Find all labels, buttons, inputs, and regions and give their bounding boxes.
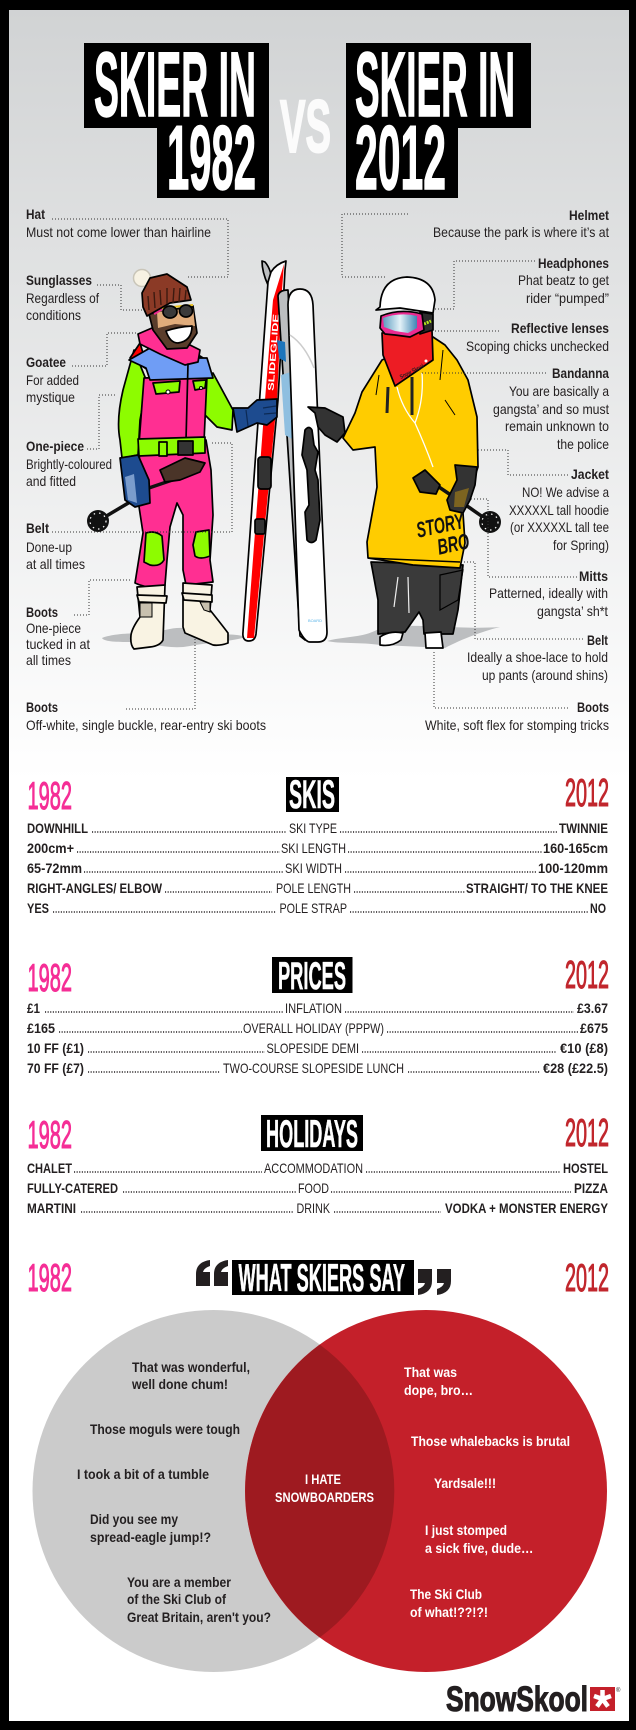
- heading: prices: [272, 955, 352, 998]
- 1982 sayings: spread-eagle jump!?: [90, 1529, 211, 1545]
- panel: skis: [27, 772, 609, 916]
- right mitt: [447, 465, 477, 513]
- 2012 sayings: The Ski Club: [410, 1586, 482, 1602]
- white twin-tip ski: BOARD: [308, 619, 323, 623]
- callout: bandanna: the police: [557, 436, 609, 452]
- callout: boots white: Boots: [577, 699, 609, 715]
- row: ski width: 100-120mm: [538, 860, 608, 876]
- illustration: skier 1982: [87, 270, 277, 649]
- row: overall holiday: £675: [580, 1020, 608, 1036]
- row: pole length: STRAIGHT/ TO THE KNEE: [466, 880, 608, 896]
- right sleeve: [203, 373, 233, 430]
- hood collar: [138, 328, 200, 365]
- callout: goatee: mystique: [26, 389, 75, 405]
- 2012 sayings: [404, 1364, 570, 1620]
- title: SKIER IN: [94, 34, 256, 136]
- bandanna: [382, 330, 433, 386]
- row: slopeside demi: €10 (£8): [560, 1040, 608, 1056]
- callout: bandanna: [422, 365, 609, 452]
- row: pole length: [27, 880, 608, 896]
- 1982 sayings: That was wonderful,: [132, 1359, 250, 1375]
- callout: reflective lenses: Reflective lenses: [511, 320, 609, 336]
- callout: hat: Must not come lower than hairline: [26, 224, 211, 240]
- venn diagram: [32, 1310, 607, 1672]
- left sleeve: [119, 350, 147, 458]
- callout: mitts: Mitts: [579, 568, 608, 584]
- callout: belt: at all times: [26, 556, 85, 572]
- row: food: PIZZA: [574, 1180, 608, 1196]
- row: inflation: INFLATION: [285, 1000, 342, 1016]
- year 1982: 1982: [28, 775, 72, 818]
- callout: headphones: Phat beatz to get: [518, 272, 609, 288]
- callout: sunglasses: Regardless of: [26, 290, 99, 306]
- hoodie graffiti: BRO: [435, 529, 471, 560]
- callout: jacket: for Spring): [553, 537, 609, 553]
- callout: goatee: For added: [26, 372, 79, 388]
- callout: headphones: Headphones: [538, 255, 609, 271]
- panel: what skiers say: [28, 1257, 609, 1672]
- callout: boots tucked: all times: [26, 652, 71, 668]
- row: ski length: [27, 840, 608, 856]
- callout: jacket: (or XXXXXL tall tee: [510, 519, 609, 535]
- pants: [371, 562, 463, 634]
- row: accommodation: [27, 1160, 608, 1176]
- callout: helmet: [342, 207, 609, 277]
- row: accommodation: ACCOMMODATION: [264, 1160, 363, 1176]
- callout: hat: Hat: [26, 206, 45, 222]
- 1982 sayings: Great Britain, aren't you?: [127, 1609, 271, 1625]
- row: ski width: SKI WIDTH: [285, 860, 342, 876]
- beanie: [142, 274, 191, 316]
- row: inflation: £3.67: [577, 1000, 608, 1016]
- callout: boots off-white: Off-white, single buckle, rear-entry ski boots: [26, 717, 266, 733]
- row: ski type: [27, 820, 608, 836]
- row: slopeside lunch: €28 (£22.5): [543, 1060, 608, 1076]
- registered mark: ®: [616, 1687, 621, 1694]
- knee pads: [144, 532, 164, 565]
- callout: jacket: [477, 450, 609, 553]
- sunglasses: [154, 305, 193, 318]
- heading: skis: SKIS: [289, 773, 335, 817]
- callout: one-piece: and fitted: [26, 473, 76, 489]
- row: ski type: DOWNHILL: [27, 820, 88, 836]
- left glove: [308, 407, 345, 442]
- panel: prices: [27, 954, 609, 1076]
- 1982 sayings: I took a bit of a tumble: [77, 1466, 209, 1482]
- helmet: [376, 277, 435, 313]
- callout: boots white: [425, 652, 609, 733]
- legs: [135, 440, 213, 587]
- callout: belt: [462, 562, 608, 683]
- row: slopeside demi: SLOPESIDE DEMI: [266, 1040, 359, 1056]
- circle: 2012: [245, 1310, 607, 1672]
- title block: skier in 2012: [346, 34, 531, 209]
- callout: helmet: Because the park is where it’s at: [433, 224, 609, 240]
- row: ski length: 200cm+: [27, 840, 74, 856]
- callout: mitts: Patterned, ideally with: [489, 585, 608, 601]
- year 1982: 1982: [28, 1257, 72, 1300]
- 2012 sayings: dope, bro…: [404, 1382, 473, 1398]
- callout: one-piece: [26, 395, 117, 489]
- panel: holidays: HOLIDAYS: [266, 1113, 358, 1156]
- row: pole strap: [27, 900, 606, 916]
- panel: holidays: [27, 1112, 609, 1216]
- callouts: 1982: [26, 206, 266, 733]
- 1982 sayings: Those moguls were tough: [90, 1421, 240, 1437]
- earphone wire: [397, 373, 433, 467]
- callout: headphones: [434, 255, 609, 309]
- blue yoke: [129, 348, 213, 380]
- 2012 sayings: That was: [404, 1364, 457, 1380]
- 1982 sayings: [77, 1359, 271, 1625]
- hoodie: [343, 337, 478, 568]
- row: drink: DRINK: [296, 1200, 331, 1216]
- right mitten: [233, 399, 277, 432]
- row: slopeside demi: 10 FF (£1): [27, 1040, 84, 1056]
- row: pole strap: YES: [27, 900, 49, 916]
- illustration: skis between the skiers: [102, 261, 500, 648]
- callout: sunglasses: conditions: [26, 307, 81, 323]
- row: drink: [27, 1200, 609, 1216]
- callout: sunglasses: [26, 272, 143, 323]
- callout: belt: up pants (around shins): [482, 667, 608, 683]
- 2012 sayings: I just stomped: [425, 1522, 507, 1538]
- belt: [138, 437, 205, 456]
- 2012 sayings: Those whalebacks is brutal: [411, 1433, 570, 1449]
- callout: mitts: gangsta’ sh*t: [537, 603, 608, 619]
- red ski: SLIDEGLIDE: [266, 313, 281, 391]
- callout: jacket: Jacket: [571, 466, 609, 482]
- callout: boots tucked: [26, 580, 132, 668]
- callout: belt: Done-up: [26, 539, 72, 555]
- callout: hat: [26, 206, 228, 277]
- row: ski type: TWINNIE: [559, 820, 608, 836]
- title block: skier in 2012: 2012: [355, 108, 446, 209]
- row: slopeside lunch: [27, 1060, 608, 1076]
- row: ski width: 65-72mm: [27, 860, 82, 876]
- red shoulder patches: [130, 343, 148, 370]
- title: [84, 34, 531, 209]
- ground shadow right: [327, 626, 500, 648]
- heading: skis: [286, 773, 339, 817]
- callout: one-piece: One-piece: [26, 438, 84, 454]
- callout: jacket: XXXXXL tall hoodie: [509, 502, 609, 518]
- callouts: 2012: [342, 207, 609, 733]
- row: accommodation: CHALET: [27, 1160, 72, 1176]
- callout: boots off-white: Boots: [26, 699, 58, 715]
- row: food: FULLY-CATERED: [27, 1180, 118, 1196]
- callout: goatee: Goatee: [26, 354, 66, 370]
- torso: [139, 376, 207, 444]
- circle: 1982: [32, 1310, 394, 1672]
- callout: reflective lenses: Scoping chicks unchecked: [466, 338, 609, 354]
- row: pole strap: POLE STRAP: [280, 900, 347, 916]
- callout: jacket: NO! We advise a: [522, 484, 609, 500]
- callout: one-piece: Brightly-coloured: [26, 456, 112, 472]
- title block: skier in 1982: [84, 34, 269, 209]
- icon: closing quote mark: [418, 1269, 451, 1295]
- row: inflation: £1: [27, 1000, 40, 1016]
- shoes: [380, 632, 443, 648]
- icon: red square with star: [590, 1687, 615, 1711]
- row: accommodation: HOSTEL: [563, 1160, 608, 1176]
- callout: goatee: [26, 333, 137, 405]
- row: overall holiday: OVERALL HOLIDAY (PPPW): [243, 1020, 384, 1036]
- callout: boots tucked: tucked in at: [26, 636, 90, 652]
- row: slopeside lunch: TWO-COURSE SLOPESIDE LUNCH: [223, 1060, 404, 1076]
- head: [149, 306, 197, 349]
- callout: boots off-white: [26, 637, 266, 733]
- callout: belt: [26, 443, 232, 572]
- versus label: VS: [280, 85, 331, 168]
- callout: mitts: [470, 499, 608, 619]
- title block: skier in 1982: 1982: [167, 108, 256, 209]
- 1982 sayings: well done chum!: [131, 1376, 228, 1392]
- shared saying: [275, 1471, 374, 1505]
- callout: boots white: White, soft flex for stomping tricks: [425, 717, 609, 733]
- zip and pockets: [153, 364, 206, 440]
- overlap: [245, 1345, 394, 1637]
- row: pole length: RIGHT-ANGLES/ ELBOW: [27, 880, 163, 896]
- row: overall holiday: £165: [27, 1020, 55, 1036]
- pole: [413, 470, 501, 533]
- callout: reflective lenses: [433, 320, 609, 354]
- ski pole: [87, 458, 205, 532]
- callout: headphones: rider “pumped”: [526, 290, 609, 306]
- 2012 sayings: Yardsale!!!: [434, 1475, 496, 1491]
- row: slopeside demi: [27, 1040, 608, 1056]
- row: pole strap: NO: [590, 900, 606, 916]
- callout: boots tucked: Boots: [26, 604, 58, 620]
- pompom: [134, 270, 150, 286]
- row: slopeside lunch: 70 FF (£7): [27, 1060, 84, 1076]
- row: pole length: POLE LENGTH: [276, 880, 351, 896]
- hoodie graffiti: [414, 508, 472, 563]
- callout: helmet: Helmet: [569, 207, 609, 223]
- 2012 sayings: of what!??!?!: [410, 1604, 488, 1620]
- shared saying: SNOWBOARDERS: [275, 1489, 374, 1505]
- heading: what skiers say: [232, 1257, 414, 1300]
- heading: holidays: [261, 1113, 363, 1156]
- callout: belt: Belt: [26, 520, 49, 536]
- row: overall holiday: [27, 1020, 608, 1036]
- row: ski type: SKI TYPE: [289, 820, 337, 836]
- row: inflation: [27, 1000, 608, 1016]
- year 1982: 1982: [28, 957, 72, 1000]
- row: ski length: 160-165cm: [543, 840, 608, 856]
- row: ski width: [27, 860, 608, 876]
- hoodie graffiti: STORY: [414, 508, 468, 543]
- callout: belt: Ideally a shoe-lace to hold: [467, 649, 608, 665]
- callout: sunglasses: Sunglasses: [26, 272, 92, 288]
- goggles: [380, 311, 433, 337]
- 2012 sayings: a sick five, dude…: [425, 1540, 534, 1556]
- row: food: [27, 1180, 608, 1196]
- illustration: skier 2012: [308, 277, 501, 648]
- callout: bandanna: Bandanna: [552, 365, 609, 381]
- left mitten: [120, 455, 150, 507]
- row: drink: MARTINI: [27, 1200, 76, 1216]
- 1982 sayings: of the Ski Club of: [127, 1591, 226, 1607]
- red ski: [243, 261, 286, 641]
- white twin-tip ski: [277, 289, 327, 642]
- callout: bandanna: gangsta’ and so must: [493, 401, 609, 417]
- row: ski length: SKI LENGTH: [281, 840, 346, 856]
- panel: what skiers say: WHAT SKIERS SAY: [238, 1257, 405, 1300]
- hood strings: [387, 377, 412, 415]
- row: food: FOOD: [298, 1180, 329, 1196]
- shared saying: I HATE: [305, 1471, 341, 1487]
- callout: boots tucked: One-piece: [26, 620, 81, 636]
- logo: SnowSkool: SnowSkool: [446, 1680, 588, 1719]
- heading: prices: PRICES: [278, 955, 346, 998]
- year 1982: 1982: [28, 1114, 72, 1157]
- boots: [131, 583, 228, 649]
- callout: bandanna: You are basically a: [509, 383, 609, 399]
- 1982 sayings: You are a member: [127, 1574, 231, 1590]
- callout: bandanna: remain unknown to: [505, 418, 609, 434]
- ground shadow left: [102, 628, 246, 647]
- bandanna: Snow Skool: [399, 364, 425, 381]
- icon: opening quote mark: [196, 1260, 228, 1286]
- 1982 sayings: Did you see my: [90, 1511, 178, 1527]
- callout: belt: Belt: [587, 632, 608, 648]
